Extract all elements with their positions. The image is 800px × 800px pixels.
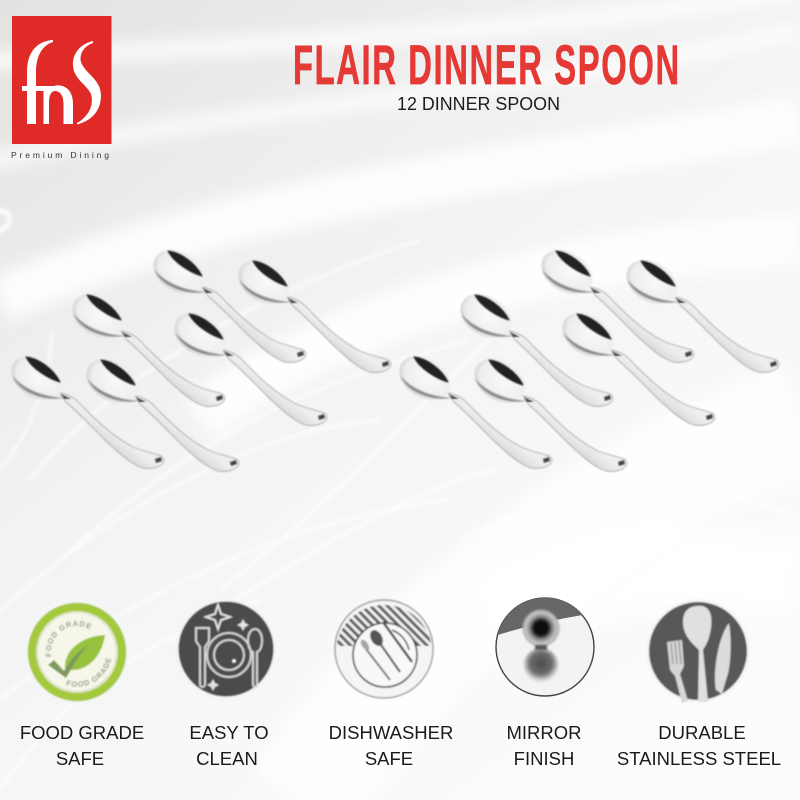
spoon bbox=[230, 251, 391, 372]
label: easy to clean: EASY TO bbox=[189, 722, 269, 743]
icon: durable stainless steel bbox=[646, 599, 750, 703]
icon: food grade safe badge bbox=[26, 602, 128, 702]
label: food grade safe: SAFE bbox=[56, 748, 104, 769]
knife bbox=[715, 623, 731, 694]
spoon bbox=[64, 285, 225, 406]
logo letters bbox=[22, 40, 101, 124]
icon: food grade safe badge: FOOD GRADE bbox=[66, 657, 112, 688]
spoon bbox=[466, 350, 627, 471]
icon: mirror finish bbox=[496, 598, 594, 696]
spoon bbox=[452, 285, 613, 406]
sparkles bbox=[206, 605, 230, 629]
spoon bbox=[3, 347, 164, 468]
spoon bbox=[166, 304, 327, 425]
label: food grade safe: FOOD GRADE bbox=[20, 722, 144, 743]
title: FLAIR DINNER SPOON bbox=[293, 33, 679, 96]
label: mirror finish: FINISH bbox=[514, 748, 574, 769]
spoon set: right group of six bbox=[391, 241, 779, 471]
label: durable stainless steel: STAINLESS STEEL bbox=[617, 748, 781, 769]
tablespoon bbox=[683, 606, 711, 702]
spoon bbox=[618, 251, 779, 372]
plate bbox=[207, 633, 251, 677]
logo tagline: Premium Dining bbox=[11, 150, 109, 160]
fork bbox=[667, 640, 688, 703]
spoon bbox=[78, 350, 239, 471]
label: dishwasher safe: SAFE bbox=[365, 748, 413, 769]
spoon bbox=[554, 304, 715, 425]
logo: FnS Premium Dining bbox=[11, 16, 112, 160]
subtitle: 12 DINNER SPOON bbox=[397, 94, 560, 114]
cutlery on plate bbox=[366, 622, 412, 680]
icon: easy to clean bbox=[176, 598, 276, 700]
label: easy to clean: CLEAN bbox=[196, 748, 258, 769]
fork bbox=[196, 628, 209, 687]
spoon set: left group of six bbox=[3, 241, 391, 471]
label: durable stainless steel: DURABLE bbox=[658, 722, 746, 743]
icon: dishwasher safe bbox=[335, 600, 433, 698]
icon: food grade safe badge: FOOD GRADE bbox=[45, 620, 92, 658]
spoon bbox=[533, 241, 694, 362]
spoon bbox=[391, 347, 552, 468]
spoon bbox=[145, 241, 306, 362]
spoon bbox=[248, 629, 262, 687]
label: mirror finish: MIRROR bbox=[506, 722, 582, 743]
label: dishwasher safe: DISHWASHER bbox=[329, 722, 453, 743]
